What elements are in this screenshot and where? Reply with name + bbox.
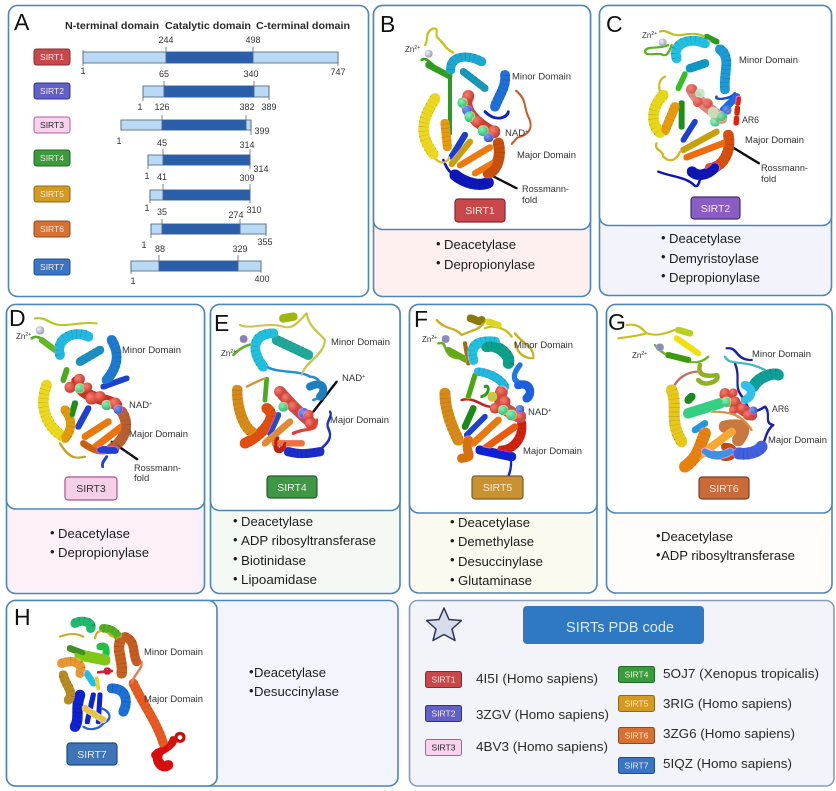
structure labels: Minor Domain <box>752 349 811 360</box>
structure labels: Major Domain <box>330 415 389 426</box>
structure labels: 2+ <box>230 349 236 355</box>
structure labels <box>422 335 582 457</box>
SIRT2 row: 340 <box>243 69 259 79</box>
protein structure SIRT3 <box>32 318 137 467</box>
structure labels: Major Domain <box>144 694 203 705</box>
panel E: SIRT4 <box>210 304 400 594</box>
legend: SIRT7 <box>618 756 792 774</box>
activities SIRT2: • <box>661 230 666 245</box>
legend: SIRT7: SIRT7 <box>625 760 649 770</box>
SIRT6 row: 355 <box>257 237 273 247</box>
panel letter D: D <box>9 305 26 331</box>
badge SIRT1: SIRT1 <box>465 205 495 217</box>
protein structure SIRT2 <box>645 31 759 186</box>
activities SIRT5: Glutaminase <box>458 573 532 588</box>
panel letter E: E <box>214 310 229 336</box>
activities SIRT4: • <box>233 532 238 547</box>
SIRT6 row: 274 <box>228 210 244 220</box>
SIRT7 row: SIRT7 <box>40 262 64 272</box>
panel letter H: H <box>14 604 31 630</box>
SIRT2 row: 389 <box>261 102 277 112</box>
activities SIRT4: • <box>233 551 238 566</box>
structure labels <box>221 337 390 426</box>
panel D: SIRT3 <box>6 304 204 594</box>
activities SIRT1: Depropionylase <box>444 257 535 272</box>
activities SIRT6: ADP ribosyltransferase <box>661 548 795 563</box>
badge SIRT5: SIRT5 <box>483 482 512 494</box>
badge SIRT6: SIRT6 <box>709 483 739 495</box>
structure labels: 2+ <box>651 31 657 37</box>
panel letter C: C <box>606 11 623 37</box>
panel H: SIRT7 <box>6 600 398 786</box>
structure labels: NAD <box>505 128 525 139</box>
activities SIRT2: Deacetylase <box>669 231 741 246</box>
structure labels: AR6 <box>742 115 759 126</box>
activities SIRT6: • <box>656 547 661 562</box>
legend: SIRT3 <box>426 739 608 756</box>
activities SIRT3 <box>50 525 149 560</box>
activities SIRT7: Deacetylase <box>254 665 326 680</box>
badge SIRT4: SIRT4 <box>277 482 307 494</box>
structure labels: Zn <box>642 31 651 40</box>
structure labels: NAD <box>342 373 362 384</box>
legend: SIRT3: SIRT3 <box>432 742 456 752</box>
SIRT1 row <box>34 35 346 77</box>
SIRT5 row: 309 <box>239 173 255 183</box>
structure labels: fold <box>522 195 537 206</box>
activities SIRT6: • <box>656 528 661 543</box>
badge SIRT7: SIRT7 <box>77 749 107 761</box>
SIRT3 row: 399 <box>254 126 270 136</box>
SIRT4 row: 1 <box>144 171 150 181</box>
activities SIRT4: • <box>233 513 238 528</box>
panel G: SIRT6 <box>606 304 832 593</box>
domain headings: Catalytic domain <box>165 21 251 32</box>
activities SIRT1 <box>436 236 535 272</box>
legend: SIRT4 <box>618 666 819 682</box>
badge SIRT6 <box>699 477 749 499</box>
protein structure SIRT5 <box>437 318 533 477</box>
activities SIRT1: • <box>436 236 441 251</box>
activities SIRT5 <box>450 514 543 588</box>
SIRT7 row: 400 <box>254 274 270 284</box>
structure labels <box>405 45 576 206</box>
icon: star <box>426 608 462 640</box>
SIRT4 row: 314 <box>239 140 255 150</box>
activities SIRT2 <box>661 230 760 285</box>
structure labels: Minor Domain <box>739 55 798 66</box>
protein structure SIRT1 <box>422 28 531 188</box>
SIRT2 row: 1 <box>137 102 143 112</box>
structure labels: + <box>548 408 551 414</box>
SIRT1 row: 244 <box>158 35 174 45</box>
SIRT1 row: SIRT1 <box>40 52 64 62</box>
structure labels: + <box>362 374 365 380</box>
panel B: SIRT1 <box>374 6 590 296</box>
structure labels: Major Domain <box>768 435 827 446</box>
badge SIRT4 <box>267 476 317 498</box>
activities SIRT5: Demethylase <box>458 534 534 549</box>
structure labels: Zn <box>16 332 25 341</box>
badge SIRT3: SIRT3 <box>76 483 106 495</box>
structure labels: Major Domain <box>745 135 804 146</box>
structure labels <box>642 31 808 185</box>
domain headings: N-terminal domain <box>65 21 159 32</box>
activities SIRT5: • <box>450 572 455 587</box>
protein structure SIRT6 <box>618 325 778 467</box>
SIRT4 row: 45 <box>157 138 167 148</box>
activities SIRT3: Depropionylase <box>58 545 149 560</box>
legend: SIRT2: 3ZGV (Homo sapiens) <box>476 707 609 722</box>
SIRT5 row <box>34 172 262 215</box>
structure labels <box>144 647 203 705</box>
SIRT5 row: SIRT5 <box>40 189 64 199</box>
panel letter A: A <box>14 9 30 35</box>
SIRT3 row <box>34 102 270 146</box>
structure labels: + <box>149 401 152 407</box>
SIRT2 row: 65 <box>159 69 169 79</box>
structure labels: Zn <box>632 351 641 360</box>
structure labels <box>16 332 188 484</box>
activities SIRT1: Deacetylase <box>444 237 516 252</box>
legend: SIRT4: SIRT4 <box>625 670 649 680</box>
structure labels: Rossmann- <box>761 163 808 174</box>
legend: SIRT5: SIRT5 <box>625 698 649 708</box>
activities SIRT7: Desuccinylase <box>254 684 339 699</box>
protein structure SIRT4 <box>233 313 337 454</box>
structure labels: NAD <box>129 400 149 411</box>
SIRT7 row: 88 <box>155 244 165 254</box>
legend: SIRT3: 4BV3 (Homo sapiens) <box>476 739 608 754</box>
legend: SIRT6 <box>618 726 795 744</box>
structure labels: fold <box>134 473 149 484</box>
structure labels: Minor Domain <box>122 345 181 356</box>
structure labels: Major Domain <box>517 150 576 161</box>
legend: SIRT5: 3RIG (Homo sapiens) <box>663 696 792 711</box>
SIRT1 row: 747 <box>330 67 346 77</box>
SIRT2 row <box>34 69 277 112</box>
panel A: domain architecture <box>8 6 368 296</box>
SIRT7 row <box>34 244 270 286</box>
panel letter F: F <box>414 306 428 332</box>
SIRT4 row: SIRT4 <box>40 153 64 163</box>
structure labels: Minor Domain <box>514 340 573 351</box>
SIRT6 row: 35 <box>157 207 167 217</box>
activities SIRT5: Desuccinylase <box>458 554 543 569</box>
activities SIRT4: • <box>233 571 238 586</box>
activities SIRT1: • <box>436 255 441 270</box>
SIRT5 row: 41 <box>157 172 167 182</box>
activities SIRT2: Depropionylase <box>669 270 760 285</box>
heading: SIRTs PDB code <box>523 606 704 644</box>
legend: SIRT1: 4I5I (Homo sapiens) <box>476 671 598 686</box>
activities SIRT6 <box>656 528 795 563</box>
protein structure SIRT7 <box>60 621 184 766</box>
structure labels: Major Domain <box>523 446 582 457</box>
structure labels: fold <box>761 174 776 185</box>
activities SIRT7: • <box>249 683 254 698</box>
legend: SIRT7: 5IQZ (Homo sapiens) <box>663 756 792 771</box>
SIRT4 row <box>34 138 269 181</box>
SIRT3 row: 382 <box>239 102 255 112</box>
SIRT4 row: 314 <box>253 164 269 174</box>
domain headings <box>65 21 350 32</box>
structure labels: 2+ <box>431 335 437 341</box>
SIRT3 row: 1 <box>116 136 122 146</box>
SIRT1 row: 1 <box>80 66 86 76</box>
activities SIRT4: Lipoamidase <box>241 572 317 587</box>
legend: SIRT6: SIRT6 <box>625 730 649 740</box>
activities SIRT4: Deacetylase <box>241 514 313 529</box>
panel F: SIRT5 <box>410 304 597 593</box>
structure labels: 2+ <box>414 45 420 51</box>
structure labels: 2+ <box>25 332 31 338</box>
SIRT5 row: 310 <box>246 205 262 215</box>
badge SIRT3 <box>65 477 117 500</box>
legend: SIRT2: SIRT2 <box>432 708 456 718</box>
structure labels: Zn <box>422 335 431 344</box>
heading: SIRTs PDB code: SIRTs PDB code <box>566 619 674 636</box>
SIRT5 row: 1 <box>144 203 150 213</box>
badge SIRT7 <box>67 743 117 765</box>
legend: SIRT1: SIRT1 <box>432 674 456 684</box>
badge SIRT2: SIRT2 <box>701 203 730 215</box>
domain headings: C-terminal domain <box>256 21 350 32</box>
activities SIRT5: • <box>450 533 455 548</box>
activities SIRT4: ADP ribosyltransferase <box>241 533 376 548</box>
SIRT3 row: 126 <box>154 102 170 112</box>
badge SIRT5 <box>472 476 523 499</box>
legend: SIRT4: 5OJ7 (Xenopus tropicalis) <box>663 666 819 681</box>
structure labels: Minor Domain <box>512 72 571 82</box>
SIRT2 row: SIRT2 <box>40 86 64 96</box>
structure labels <box>632 349 827 446</box>
badge SIRT2 <box>691 197 740 219</box>
activities SIRT6: Deacetylase <box>661 529 733 544</box>
structure labels: Minor Domain <box>144 647 203 658</box>
activities SIRT7: • <box>249 664 254 679</box>
structure labels: Rossmann- <box>522 184 569 195</box>
structure labels: Minor Domain <box>331 337 390 348</box>
legend: SIRT6: 3ZG6 (Homo sapiens) <box>663 726 795 741</box>
panel C: SIRT2 <box>600 6 832 296</box>
SIRT6 row <box>34 207 273 250</box>
activities SIRT2: • <box>661 249 666 264</box>
activities SIRT3: Deacetylase <box>58 526 130 541</box>
activities SIRT3: • <box>50 525 55 540</box>
structure labels: NAD <box>528 407 548 418</box>
activities SIRT4 <box>233 513 376 587</box>
badge SIRT1 <box>455 199 505 222</box>
activities SIRT5: Deacetylase <box>458 515 530 530</box>
structure labels: Zn <box>221 349 230 358</box>
structure labels: Zn <box>405 45 414 54</box>
activities SIRT2: Demyristoylase <box>669 251 759 266</box>
activities SIRT5: • <box>450 514 455 529</box>
structure labels: + <box>525 129 528 135</box>
activities SIRT4: Biotinidase <box>241 553 306 568</box>
SIRT7 row: 329 <box>232 244 248 254</box>
structure labels: AR6 <box>772 404 789 415</box>
SIRT3 row: SIRT3 <box>40 120 64 130</box>
activities SIRT7 <box>249 664 339 699</box>
structure labels: Major Domain <box>129 429 188 440</box>
panel letter B: B <box>380 11 395 37</box>
structure labels: Rossmann- <box>134 463 181 474</box>
panel letter G: G <box>608 309 626 335</box>
panel: SIRTs PDB code <box>410 600 834 786</box>
SIRT7 row: 1 <box>130 276 136 286</box>
structure labels: 2+ <box>641 351 647 357</box>
legend: SIRT2 <box>426 706 609 722</box>
activities SIRT5: • <box>450 552 455 567</box>
legend: SIRT5 <box>618 696 792 712</box>
activities SIRT3: • <box>50 544 55 559</box>
activities SIRT2: • <box>661 268 666 283</box>
SIRT6 row: SIRT6 <box>40 224 64 234</box>
SIRT6 row: 1 <box>141 240 147 250</box>
SIRT1 row: 498 <box>245 35 261 45</box>
legend: SIRT1 <box>426 671 598 688</box>
